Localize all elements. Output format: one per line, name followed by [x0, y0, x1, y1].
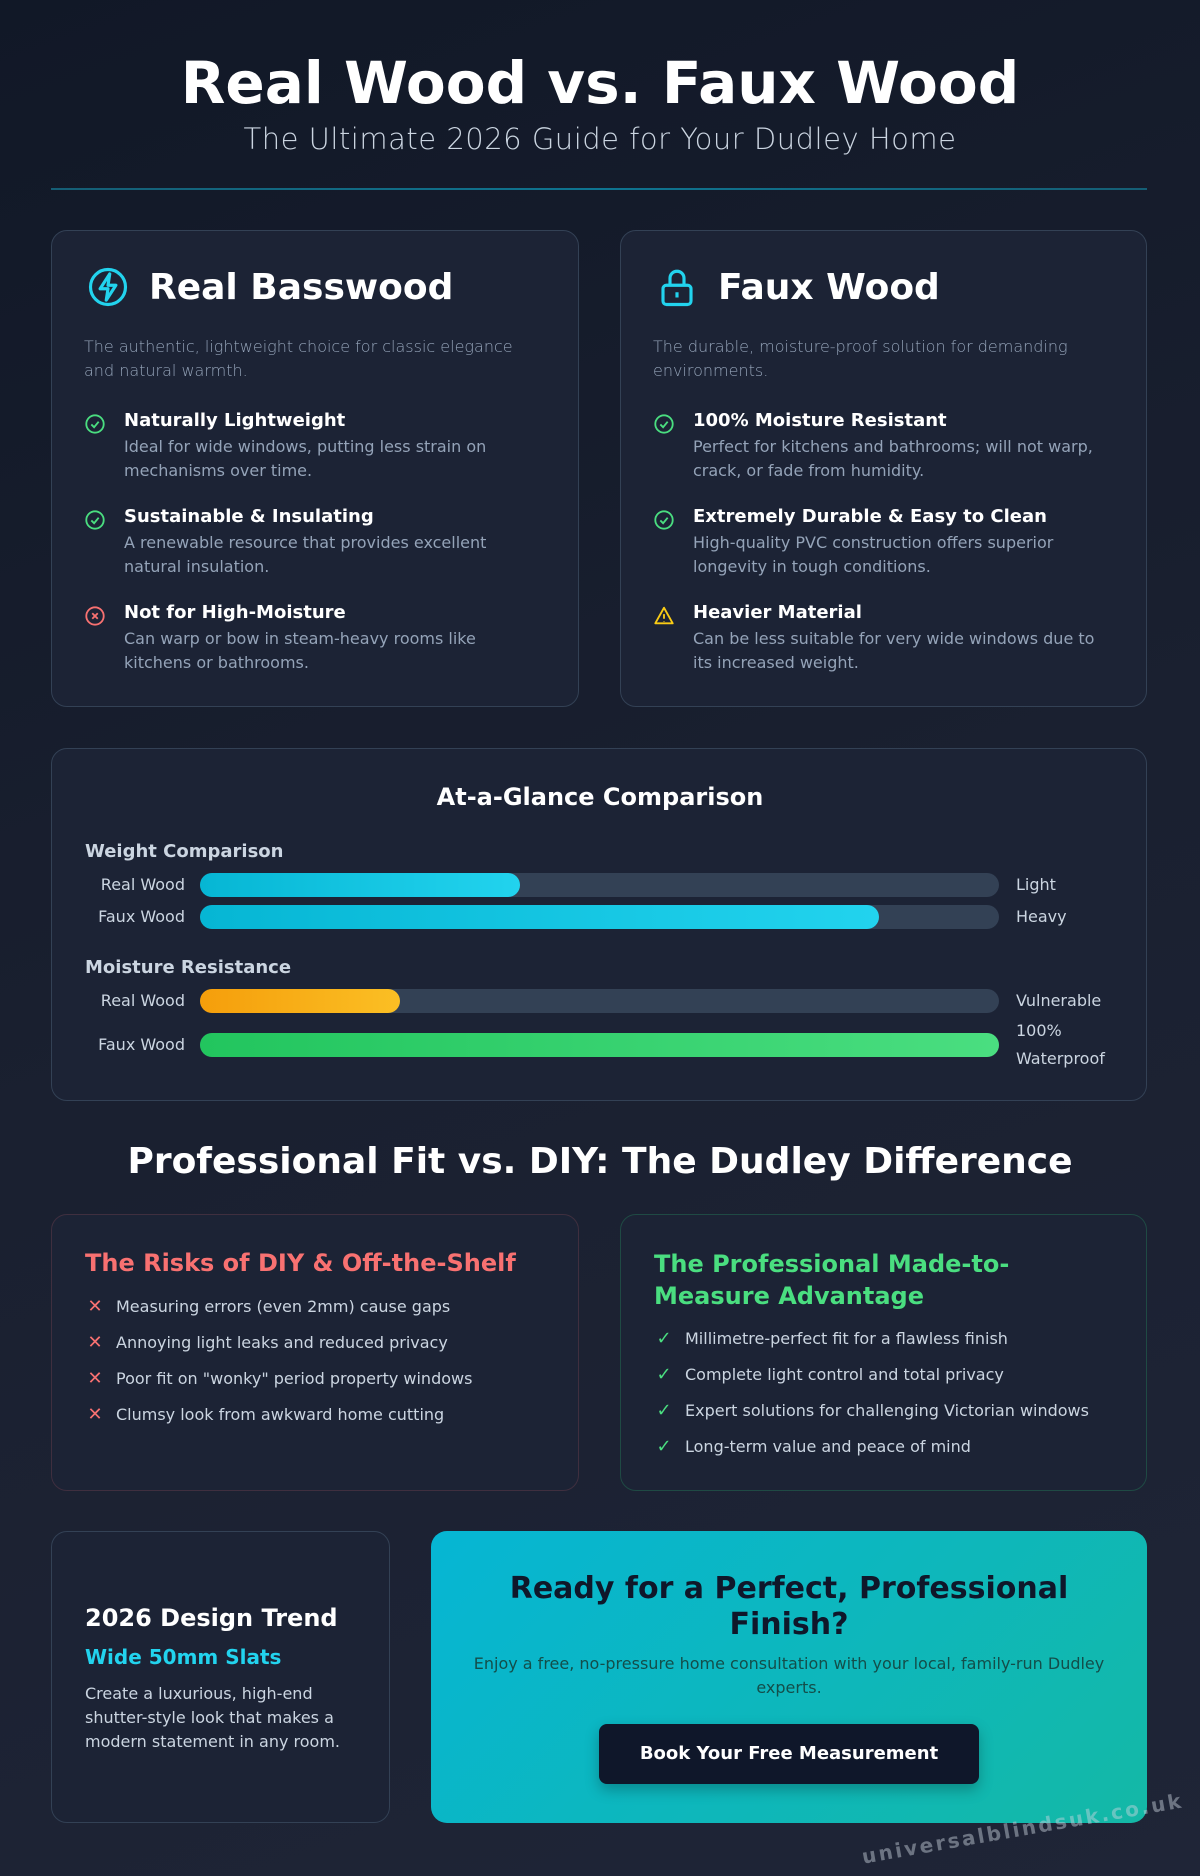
button	[599, 1724, 979, 1784]
trend subheading: Wide 50mm Slats	[85, 1645, 281, 1669]
item: sustainable: A renewable resource that provides excellent natural insulation.	[124, 533, 486, 576]
weight comparison: Real Wood	[101, 875, 185, 894]
panel: faux wood	[620, 230, 1147, 707]
item: lightweight	[85, 410, 486, 480]
description: The authentic, lightweight choice for classic elegance and natural warmth.	[84, 337, 513, 380]
item: durable: Extremely Durable & Easy to Clean	[693, 506, 1047, 527]
moisture resistance: Moisture Resistance	[85, 957, 291, 978]
list: ✕	[87, 1368, 103, 1389]
moisture resistance	[85, 957, 1106, 1068]
item: moisture resistant	[654, 410, 1093, 480]
item: lightweight: Ideal for wide windows, putting less strain on mechanisms over time.	[124, 437, 486, 480]
panel: comparison chart	[51, 748, 1147, 1101]
icon: lightning circle	[88, 268, 128, 306]
chart heading: At-a-Glance Comparison	[437, 783, 763, 811]
list: Expert solutions for challenging Victorian windows	[685, 1401, 1089, 1420]
item: not for moisture	[85, 602, 476, 672]
description: The durable, moisture-proof solution for demanding environments.	[653, 337, 1068, 380]
CTA text: Enjoy a free, no-pressure home consultation with your local, family-run Dudley experts.	[474, 1654, 1104, 1697]
title: Real Wood vs. Faux Wood	[181, 49, 1019, 117]
heading: The Professional Made-to-Measure Advantage	[654, 1250, 1009, 1310]
item: heavier: Can be less suitable for very wide windows due to its increased weight.	[693, 629, 1094, 672]
heading: The Risks of DIY & Off-the-Shelf	[85, 1249, 516, 1277]
trend text: Create a luxurious, high-end shutter-style look that makes a modern statement in any room.	[85, 1684, 340, 1751]
heading: Faux Wood	[718, 267, 940, 308]
list: ✓	[656, 1400, 672, 1421]
list: Millimetre-perfect fit for a flawless finish	[685, 1329, 1008, 1348]
list: ✕	[87, 1332, 103, 1353]
moisture resistance: Vulnerable	[1016, 991, 1101, 1010]
subtitle: The Ultimate 2026 Guide for Your Dudley Home	[244, 122, 956, 156]
list	[87, 1296, 472, 1425]
weight comparison: Weight Comparison	[85, 841, 283, 862]
icon: lock	[661, 270, 693, 306]
panel: design trend	[51, 1531, 390, 1823]
weight comparison: Light	[1016, 875, 1056, 894]
panel: DIY risks	[51, 1214, 579, 1491]
item: lightweight: Naturally Lightweight	[124, 410, 345, 431]
list: Long-term value and peace of mind	[685, 1437, 971, 1456]
list: Clumsy look from awkward home cutting	[116, 1405, 444, 1424]
moisture resistance: Faux Wood	[98, 1035, 185, 1054]
list: ✓	[656, 1328, 672, 1349]
list: ✕	[87, 1404, 103, 1425]
trend heading: 2026 Design Trend	[85, 1604, 338, 1632]
moisture resistance: Real Wood	[101, 991, 185, 1010]
watermark: universalblindsuk.co.uk	[860, 1788, 1185, 1869]
item: moisture resistant: Perfect for kitchens and bathrooms; will not warp, crack, or fade from humidity.	[693, 437, 1093, 480]
button: Book Your Free Measurement	[640, 1743, 938, 1764]
item: not for moisture: Not for High-Moisture	[124, 602, 346, 623]
list: Poor fit on "wonky" period property windows	[116, 1369, 472, 1388]
moisture resistance: 100%	[1016, 1021, 1062, 1040]
panel: professional advantage	[620, 1214, 1147, 1491]
CTA heading: Ready for a Perfect, Professional Finish?	[510, 1571, 1068, 1642]
heading: Real Basswood	[149, 267, 453, 308]
item: sustainable: Sustainable & Insulating	[124, 506, 374, 527]
list: ✓	[656, 1364, 672, 1385]
item: not for moisture: Can warp or bow in steam-heavy rooms like kitchens or bathrooms.	[124, 629, 476, 672]
panel: real basswood	[51, 230, 579, 707]
weight comparison: Faux Wood	[98, 907, 185, 926]
list: ✓	[656, 1436, 672, 1457]
list: Annoying light leaks and reduced privacy	[116, 1333, 448, 1352]
item: heavier	[654, 602, 1094, 672]
weight comparison	[85, 841, 1067, 929]
item: moisture resistant: 100% Moisture Resistant	[693, 410, 947, 431]
list: ✕	[87, 1296, 103, 1317]
moisture resistance: Waterproof	[1016, 1049, 1105, 1068]
weight comparison: Heavy	[1016, 907, 1067, 926]
section heading: Professional Fit vs. DIY: The Dudley Difference	[127, 1141, 1073, 1182]
item: sustainable	[85, 506, 486, 576]
list	[656, 1328, 1089, 1457]
list: Measuring errors (even 2mm) cause gaps	[116, 1297, 450, 1316]
item: durable	[654, 506, 1054, 576]
item: heavier: Heavier Material	[693, 602, 862, 623]
item: durable: High-quality PVC construction offers superior longevity in tough conditions.	[693, 533, 1053, 576]
panel: call to action	[431, 1531, 1147, 1823]
list: Complete light control and total privacy	[685, 1365, 1004, 1384]
